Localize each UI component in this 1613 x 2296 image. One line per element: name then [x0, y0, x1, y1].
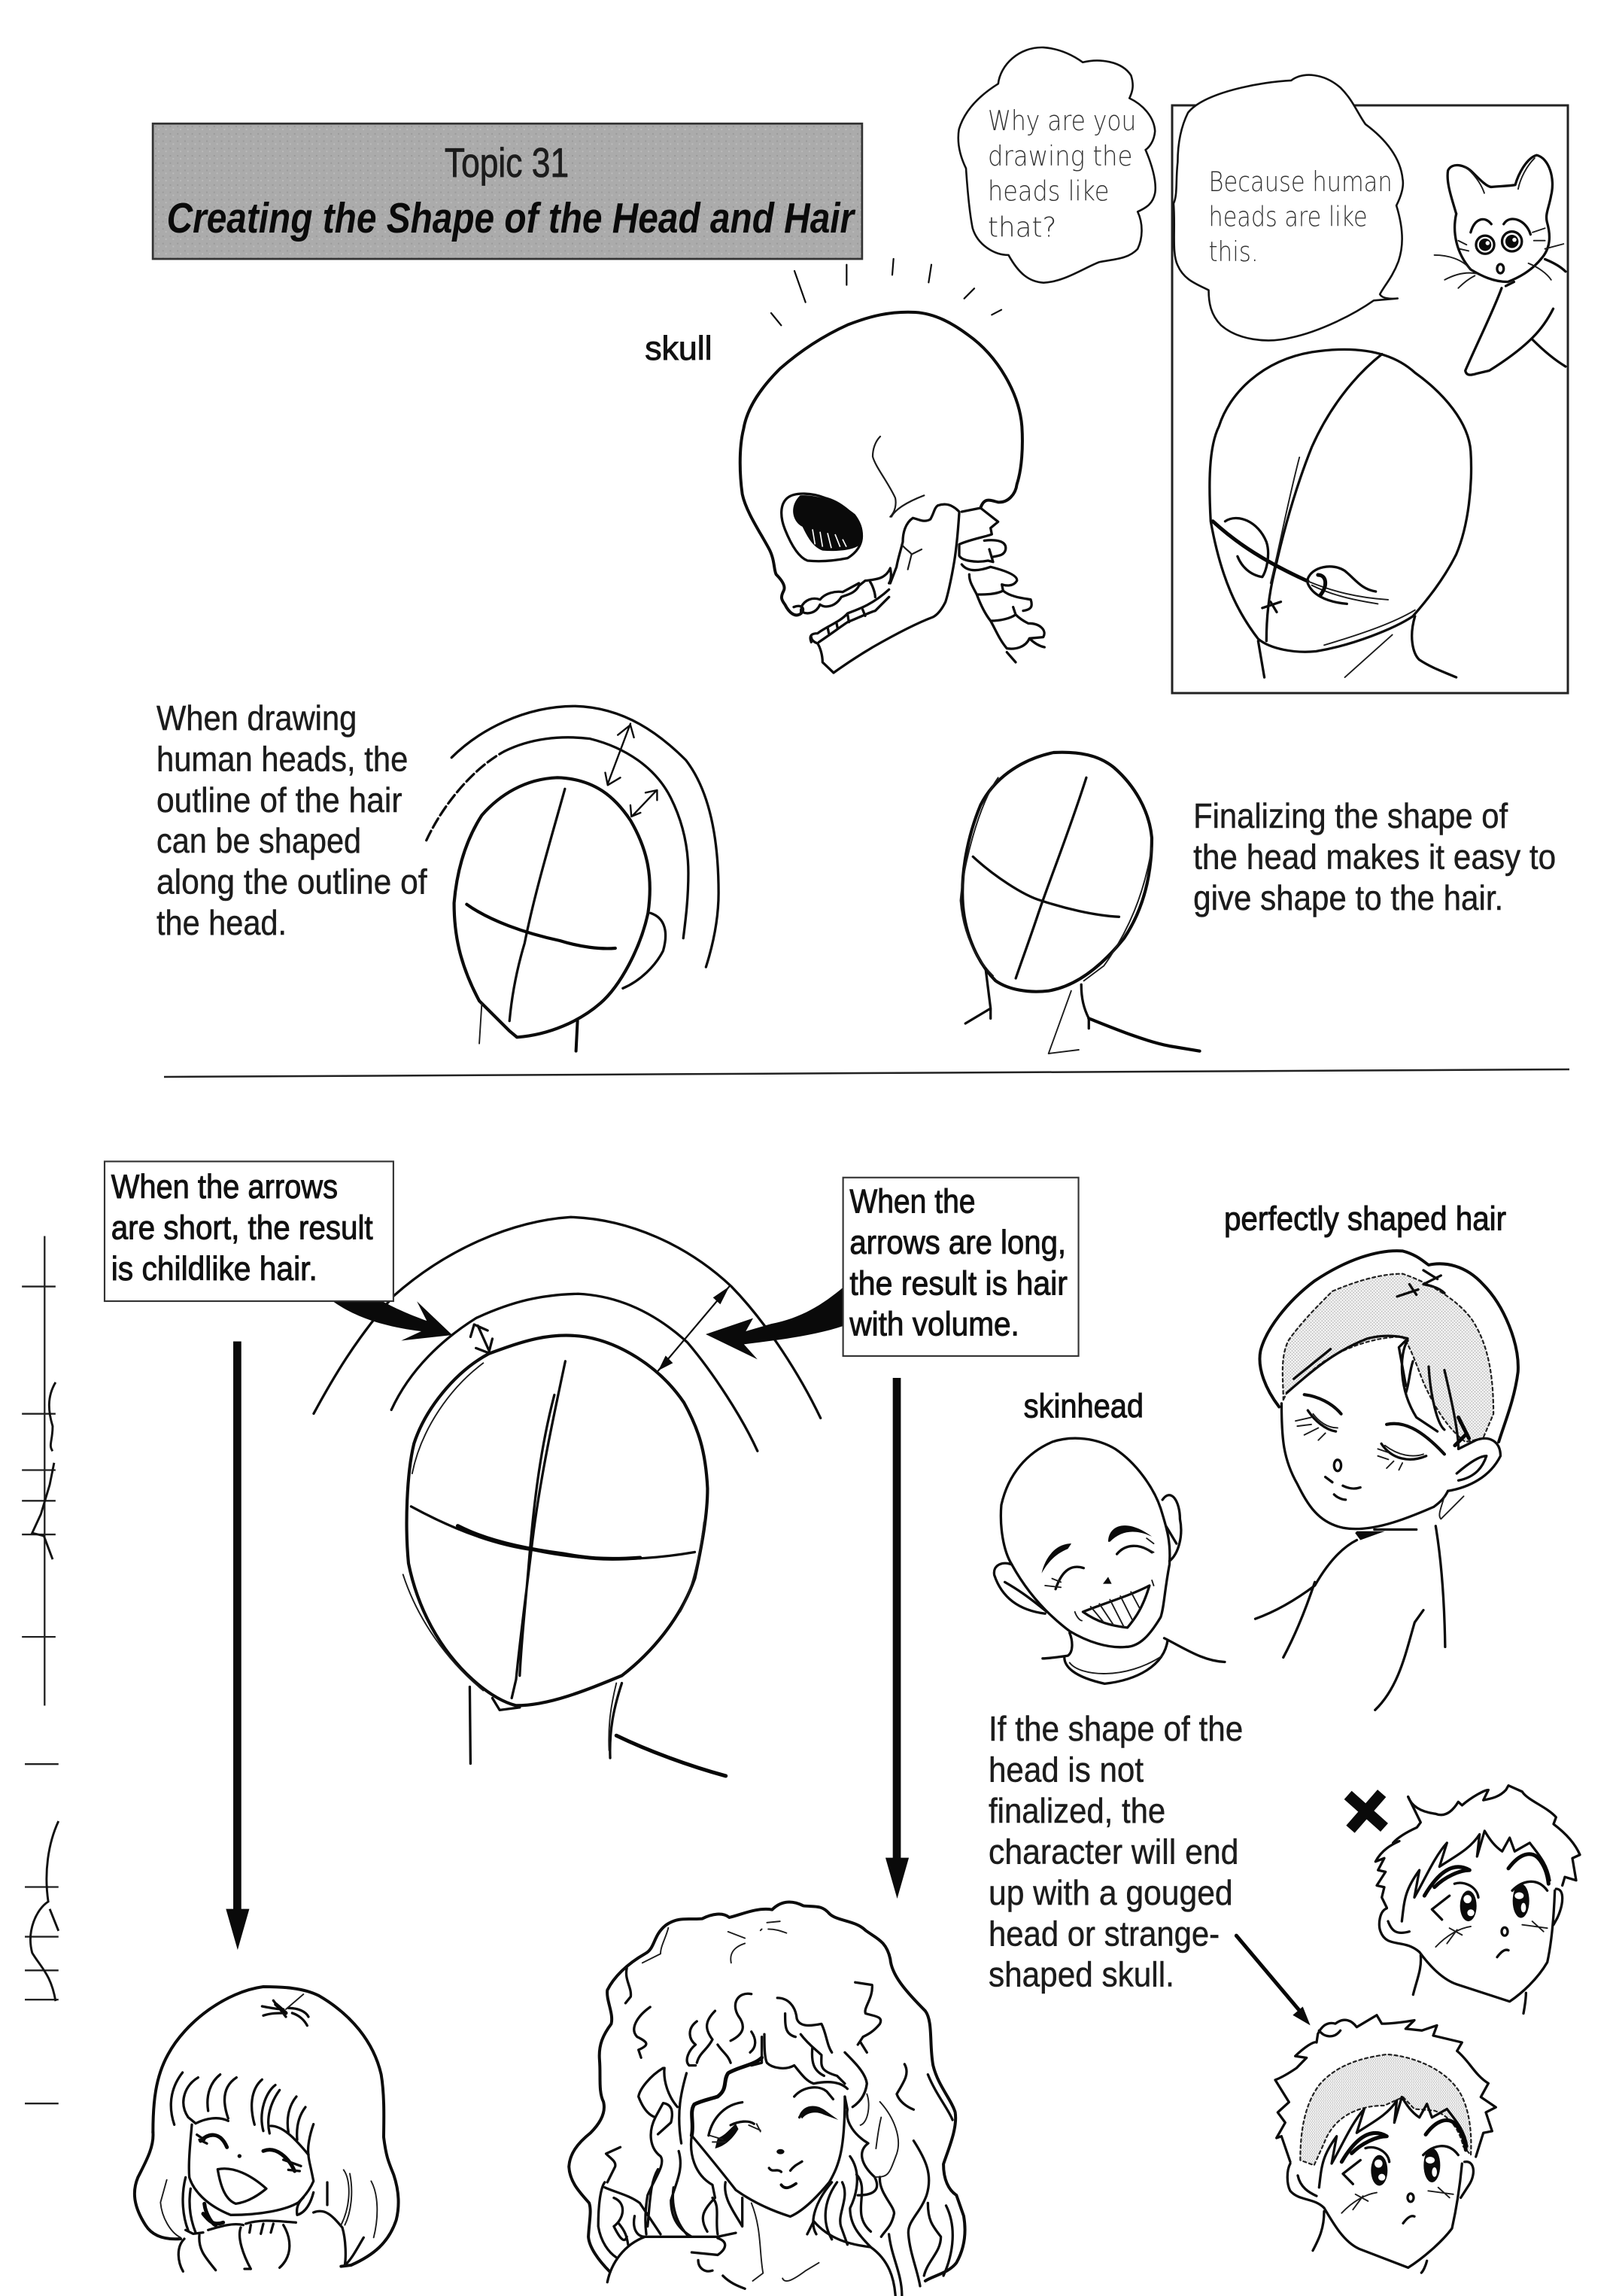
skull outline [740, 312, 1022, 615]
arrow: to gouged head [1236, 1936, 1311, 2025]
hands [178, 2221, 296, 2271]
fringe and brows [1402, 1831, 1550, 1921]
title banner [153, 123, 862, 259]
text: finalizing the shape: Finalizing the shape of [1193, 796, 1508, 835]
crop marks at left margin [22, 1236, 59, 2103]
drawing: skull in profile with spine [740, 259, 1044, 673]
arrow: down to childlike hair [226, 1341, 249, 1950]
drawing: boy with badly shaped head [1375, 1786, 1580, 2014]
short measure arrow [470, 1324, 492, 1353]
shine ticks above skull [771, 259, 1001, 325]
panel: cat dialogue comic frame [1172, 75, 1568, 693]
callout: short arrows: When the arrows [111, 1169, 338, 1206]
drawing: girl with voluminous curly hair [569, 1902, 965, 2296]
hair arcs [314, 1217, 821, 1418]
ears and jaw [1379, 1889, 1563, 2014]
curls [625, 1968, 952, 2120]
text: if the shape of the head is not finalized: up with a gouged [989, 1873, 1233, 1912]
neck vertebrae [959, 508, 1044, 662]
spiky hair [1408, 1786, 1580, 1885]
fringe and brows [1319, 2097, 1467, 2188]
speech bubble: why are you drawing [958, 47, 1156, 283]
callout: long arrows: arrows are long, [849, 1224, 1066, 1261]
callout: short arrows: is childlike hair. [111, 1251, 317, 1288]
callout: short arrows: are short, the result [111, 1209, 373, 1246]
neck and shoulders [1355, 1531, 1385, 1540]
text: finalizing the shape: the head makes it easy to [1193, 838, 1556, 877]
shoulders and neckline [607, 2221, 895, 2296]
nose, mouth and cheek marks [1341, 2188, 1454, 2223]
speech bubble: because human heads: Because human [1209, 166, 1393, 198]
speech bubble: why are you drawing: that? [988, 211, 1056, 243]
spiky hair [1275, 2015, 1496, 2162]
text: when drawing human heads: human heads, the [156, 739, 408, 778]
fringe [1286, 1336, 1459, 1449]
text: if the shape of the head is not finalized: head is not [989, 1750, 1144, 1790]
drawing: finalized head with neck [961, 753, 1200, 1054]
face [1281, 1403, 1448, 1529]
speech bubble: because human heads: this. [1209, 236, 1259, 268]
mouth [217, 2169, 266, 2203]
drawing: boy with skull guide shown [1275, 2015, 1496, 2273]
label: skull: skull [645, 330, 712, 367]
eyes [201, 2135, 295, 2171]
hair outline [1259, 1251, 1518, 1442]
drawing: perfectly shaped hair head [1256, 1251, 1518, 1710]
eyes [1056, 1546, 1152, 1589]
text: when drawing human heads [156, 698, 428, 942]
brows [1041, 1525, 1152, 1574]
arrows: hair thickness [605, 724, 657, 817]
label: perfectly shaped hair: perfectly shaped hair [1224, 1201, 1506, 1238]
hairline and face [764, 2034, 847, 2089]
bangs [171, 2072, 314, 2155]
pointer arrow right [706, 1286, 844, 1359]
pointer arrow left [332, 1300, 452, 1340]
mouth [1083, 1586, 1150, 1628]
speech bubble: why are you drawing: drawing the [988, 140, 1132, 172]
stippled skull zone [1300, 2054, 1471, 2165]
text: when drawing human heads: the head. [156, 903, 287, 942]
arrow: down to hair with volume [885, 1378, 909, 1899]
label: skinhead: skinhead [1024, 1388, 1144, 1425]
callout: long arrows [843, 1178, 1079, 1356]
drawing: large head with hair arcs [314, 1217, 844, 1776]
eyes [1432, 1881, 1548, 1921]
callout: long arrows: the result is hair [849, 1265, 1068, 1302]
long measure arrow [658, 1286, 730, 1370]
hair tuft [262, 2000, 308, 2026]
neck and collar [1043, 1633, 1225, 1683]
hair tuft [1397, 1270, 1444, 1297]
nose, mouth and cheek marks [1435, 1921, 1548, 1957]
cross guides [512, 1361, 565, 1698]
text: when drawing human heads: When drawing [156, 698, 357, 737]
ear [1448, 1438, 1500, 1491]
text: if the shape of the head is not finalized: If the shape of the [989, 1709, 1243, 1748]
callout: long arrows: with volume. [849, 1306, 1019, 1343]
drawing: head with hair outline arcs [427, 706, 718, 1051]
text: finalizing the shape: give shape to the hair. [1193, 878, 1503, 917]
text: if the shape of the head is not finalized [989, 1709, 1243, 1994]
text: when drawing human heads: outline of the hair [156, 780, 402, 820]
head outline [407, 1335, 707, 1705]
ears and jaw [1287, 2162, 1473, 2273]
text: finalizing the shape [1193, 796, 1556, 917]
speech bubble: because human heads [1174, 75, 1403, 340]
icon: white cat mascot [1435, 155, 1566, 375]
face [189, 2124, 314, 2215]
stippled skull zone [1283, 1274, 1493, 1442]
eye socket [782, 494, 863, 561]
title banner: Creating the Shape of the Head and Hair [167, 194, 856, 242]
speech bubble: because human heads: heads are like [1209, 201, 1368, 233]
icon: cross mark [1348, 1793, 1384, 1829]
callout: long arrows: When the [849, 1183, 976, 1220]
drawing: head with cross guide lines in frame [1210, 349, 1471, 677]
title banner: Topic 31 [445, 140, 569, 186]
text: if the shape of the head is not finalized: shaped skull. [989, 1955, 1174, 1994]
head [1001, 1438, 1170, 1647]
drawing: skinhead smiling [994, 1438, 1225, 1683]
drawing: girl with short childlike hair [135, 1987, 399, 2271]
side locks [598, 2068, 743, 2258]
eyes, nose and mouth [709, 2088, 833, 2136]
callout: short arrows [105, 1161, 393, 1301]
ears [994, 1495, 1181, 1613]
hair outline [569, 1902, 965, 2281]
hair outline [153, 1987, 399, 2267]
text: when drawing human heads: along the outline of [156, 862, 428, 902]
text: when drawing human heads: can be shaped [156, 821, 361, 860]
speech bubble: why are you drawing: heads like [988, 175, 1109, 207]
text: if the shape of the head is not finalized: character will end [989, 1832, 1238, 1871]
neck and shoulder [469, 1683, 622, 1764]
text: if the shape of the head is not finalized: head or strange- [989, 1914, 1220, 1953]
speech bubble: why are you drawing: Why are you [988, 105, 1136, 137]
eyes [1343, 2146, 1458, 2185]
text: if the shape of the head is not finalized: finalized, the [989, 1791, 1165, 1830]
inner hair strands [297, 2182, 363, 2265]
